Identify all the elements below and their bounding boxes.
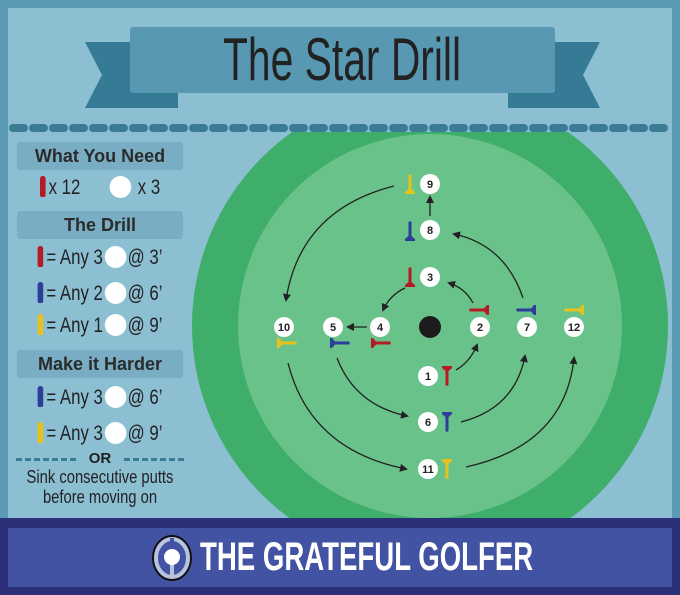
OR divider: OR bbox=[89, 450, 111, 467]
balls: 10 bbox=[278, 322, 290, 334]
title banner: The Star Drill bbox=[223, 26, 462, 93]
header: make it harder: Make it Harder bbox=[38, 354, 162, 374]
arrows bbox=[286, 186, 574, 469]
logo icon bbox=[152, 535, 192, 581]
balls bbox=[274, 174, 584, 479]
header: the drill: The Drill bbox=[64, 215, 136, 235]
balls: 5 bbox=[330, 322, 336, 334]
balls: 7 bbox=[524, 322, 530, 334]
balls: 4 bbox=[377, 322, 384, 334]
balls: 3 bbox=[427, 272, 433, 284]
balls: 9 bbox=[427, 179, 433, 191]
footer bbox=[0, 518, 680, 595]
ribbon tails bbox=[85, 42, 178, 108]
green circles bbox=[192, 132, 668, 518]
header: the drill bbox=[17, 211, 183, 239]
sink text: Sink consecutive putts bbox=[27, 467, 173, 487]
harder rows: = Any 3 @ 6’ bbox=[46, 386, 162, 409]
sink text bbox=[27, 467, 173, 507]
title banner bbox=[130, 27, 555, 93]
needs row: x 12 x 3 bbox=[49, 176, 160, 199]
green field and diagram bbox=[9, 42, 668, 518]
header: what you need bbox=[17, 142, 183, 170]
balls: 8 bbox=[427, 225, 433, 237]
dashed divider bbox=[13, 124, 668, 132]
sink text: before moving on bbox=[43, 487, 157, 507]
balls: 2 bbox=[477, 322, 483, 334]
left panel: = Any 3 @ 9’ bbox=[46, 422, 162, 445]
header: make it harder bbox=[17, 350, 183, 378]
left panel: = Any 1 @ 9’ bbox=[46, 314, 162, 337]
brand name: THE GRATEFUL GOLFER bbox=[200, 535, 533, 579]
tees bbox=[277, 174, 584, 479]
balls: 12 bbox=[568, 322, 580, 334]
left panel bbox=[16, 142, 184, 507]
balls: 11 bbox=[422, 464, 434, 476]
left panel: = Any 2 @ 6’ bbox=[46, 282, 162, 305]
drill rows: = Any 3 @ 3’ bbox=[46, 246, 162, 269]
OR divider bbox=[16, 450, 184, 467]
hole bbox=[419, 316, 441, 338]
header: what you need: What You Need bbox=[35, 146, 165, 166]
balls: 6 bbox=[425, 417, 431, 429]
balls: 1 bbox=[425, 371, 431, 383]
